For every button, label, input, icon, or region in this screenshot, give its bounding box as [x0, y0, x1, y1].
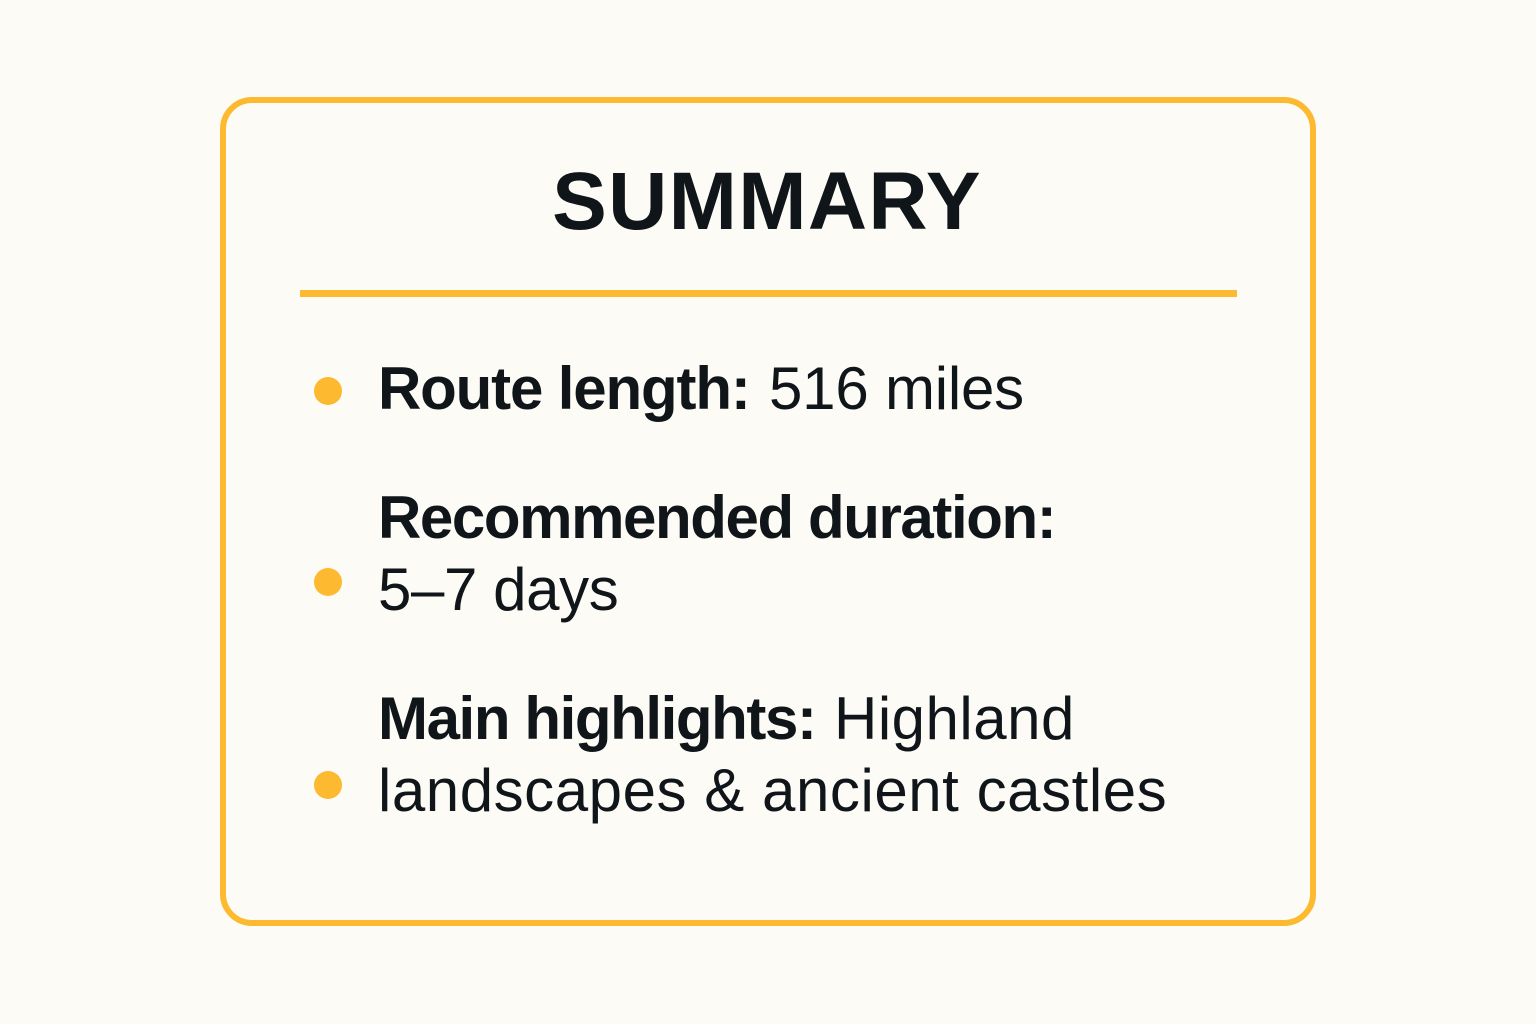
duration value: 5–7 days: [378, 556, 618, 623]
duration label: Recommended duration:: [378, 484, 1055, 551]
route length label: Route length:: [378, 355, 750, 422]
card border: [220, 97, 1316, 926]
highlights second line: landscapes & ancient castles: [378, 757, 1167, 824]
bullet dot: [314, 568, 342, 596]
route length value: 516 miles: [769, 355, 1024, 422]
title: SUMMARY: [552, 156, 982, 247]
panel: summary card: [220, 97, 1316, 926]
bullet dot: [314, 771, 342, 799]
bullet dot: [314, 377, 342, 405]
highlights first line value: Highland: [834, 685, 1075, 752]
highlights label: Main highlights:: [378, 685, 816, 752]
bullet: main highlights: [314, 685, 1167, 824]
bullet: route length: [314, 355, 1024, 422]
heading rule: [300, 290, 1237, 297]
bullet: recommended duration: [314, 484, 1055, 623]
